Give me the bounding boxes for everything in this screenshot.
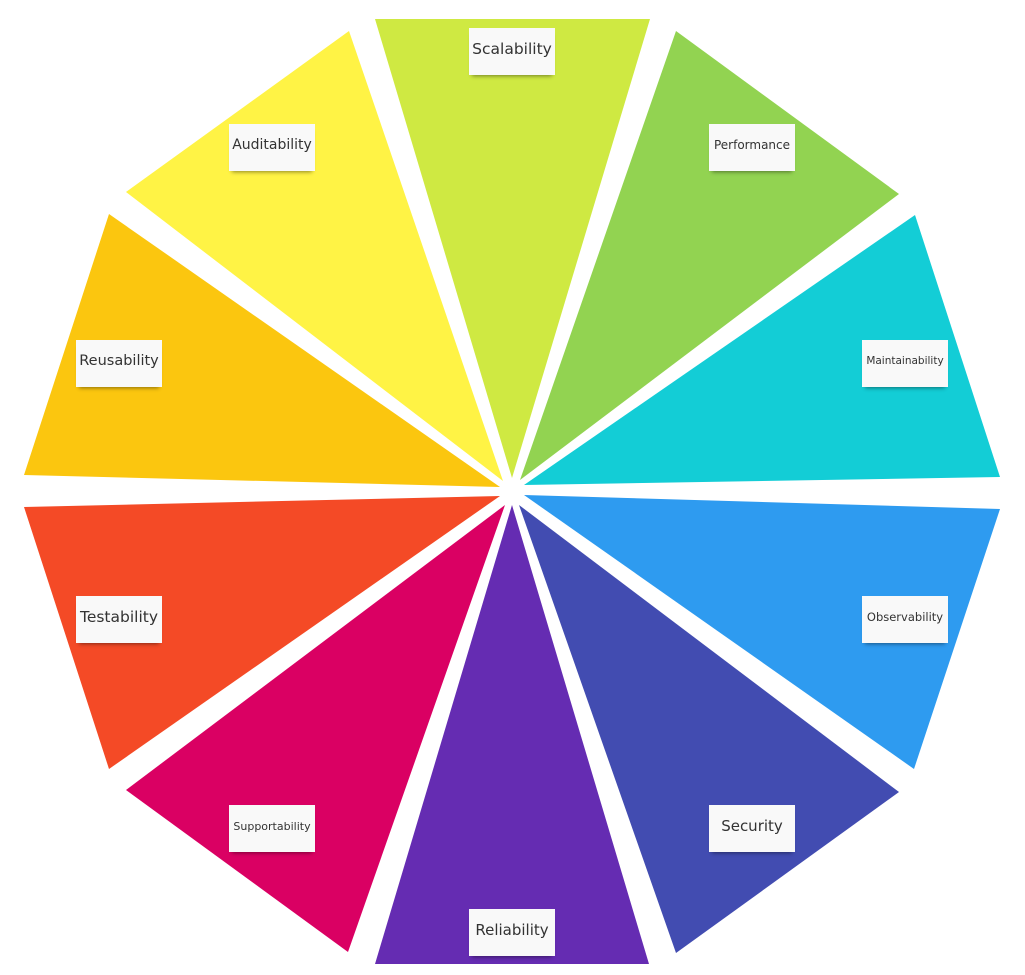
label: Performance xyxy=(709,124,795,171)
label: Maintainability: Maintainability xyxy=(866,355,944,367)
label: Observability: Observability xyxy=(867,610,943,624)
label: Supportability: Supportability xyxy=(233,820,311,832)
label: Performance: Performance xyxy=(714,138,790,152)
label: Testability xyxy=(76,596,162,643)
segment: scalability xyxy=(375,19,650,478)
label: Reliability xyxy=(469,909,555,956)
segment: supportability xyxy=(126,505,505,952)
segment: testability xyxy=(24,496,500,769)
segment: security xyxy=(519,505,899,953)
segment: reliability xyxy=(375,505,649,964)
label: Scalability xyxy=(469,28,555,75)
label: Auditability: Auditability xyxy=(232,137,312,153)
segment: performance xyxy=(520,31,899,480)
label: Reusability xyxy=(76,340,162,387)
label: Security xyxy=(709,805,795,852)
label: Reliability: Reliability xyxy=(475,921,549,939)
label: Auditability xyxy=(229,124,315,171)
label: Testability: Testability xyxy=(80,608,158,626)
segment: observability xyxy=(524,495,1000,769)
label: Scalability: Scalability xyxy=(472,40,552,58)
segment: auditability xyxy=(126,31,503,481)
label: Security: Security xyxy=(721,817,783,835)
segment: maintainability xyxy=(524,215,1000,485)
label: Supportability xyxy=(229,805,315,852)
label: Maintainability xyxy=(862,340,948,387)
label: Reusability: Reusability xyxy=(79,353,159,369)
segment: reusability xyxy=(24,214,500,487)
label: Observability xyxy=(862,596,948,643)
